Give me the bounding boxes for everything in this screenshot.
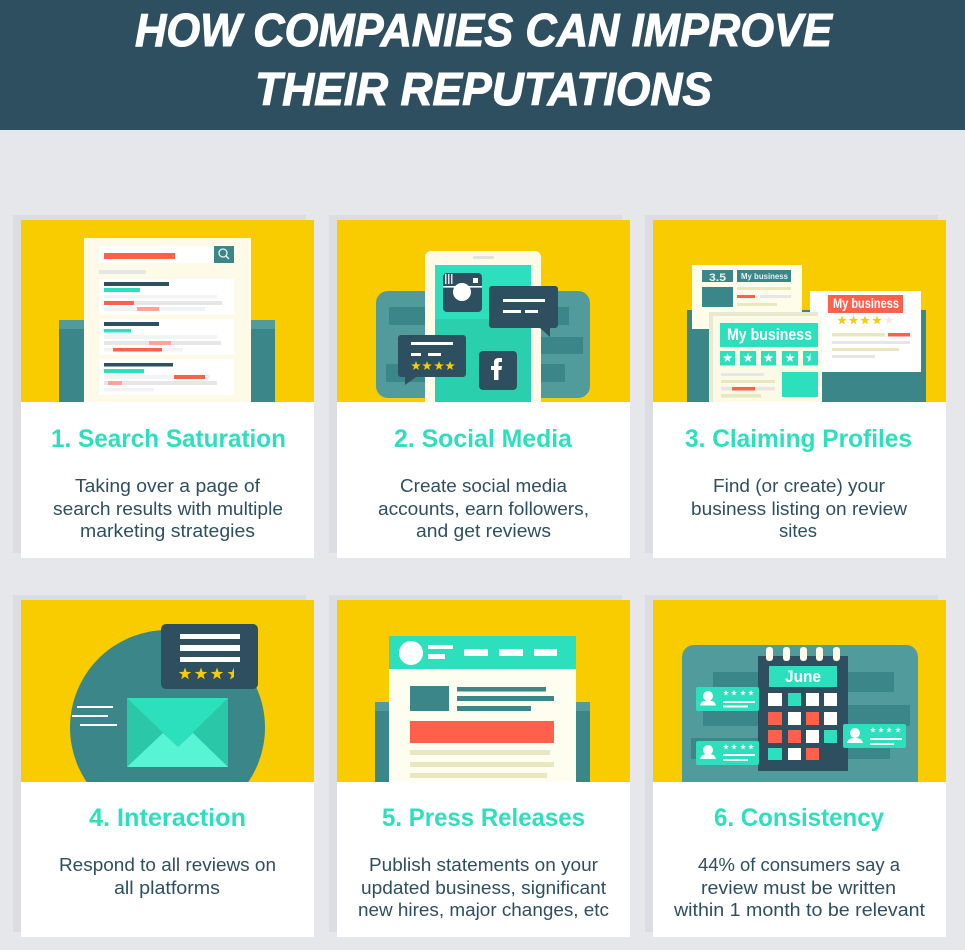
heading: search saturation: 1. Search Saturation: [51, 425, 286, 453]
text: press releases description: new hires, major changes, etc: [358, 900, 609, 920]
icon: envelope and review bubble: [70, 624, 265, 782]
text: social media description: accounts, earn followers,: [378, 499, 589, 519]
heading: interaction: 4. Interaction: [89, 804, 246, 832]
review card bottom left: [696, 741, 759, 765]
heading: consistency: 6. Consistency: [714, 804, 884, 832]
panel: search saturation: [13, 215, 314, 558]
text: social media description: Create social media: [400, 476, 568, 496]
icon: search results page: [59, 238, 275, 402]
icon: calendar with reviews: June: [785, 667, 821, 686]
text: interaction description: Respond to all reviews on: [59, 855, 276, 875]
text: claiming profiles description: sites: [779, 521, 817, 541]
panel: social media: [329, 215, 630, 558]
text: claiming profiles description: business listing on review: [691, 499, 908, 519]
icon: calendar with reviews: [682, 645, 918, 782]
icon: phone with social apps: [376, 251, 590, 402]
text: consistency description: review must be written: [701, 878, 896, 898]
icon: press release web page: [375, 636, 590, 782]
text: social media description: [378, 476, 589, 541]
text: claiming profiles description: Find (or create) your: [713, 476, 885, 496]
title: [135, 4, 833, 115]
title: THEIR REPUTATIONS: [255, 63, 712, 115]
review card top left: [696, 687, 759, 711]
text: consistency description: [673, 855, 925, 920]
review card right: [843, 724, 906, 748]
icon: business profile cards: My business: [727, 325, 812, 344]
text: press releases description: [358, 855, 609, 920]
icon: business profile cards: My business: [741, 271, 788, 281]
panel: consistency: [645, 595, 946, 937]
heading: claiming profiles: 3. Claiming Profiles: [685, 425, 912, 453]
text: consistency description: within 1 month to be relevant: [673, 900, 925, 920]
header banner: [0, 0, 965, 130]
text: search saturation description: search results with multiple: [53, 499, 283, 519]
text: interaction description: [59, 855, 276, 898]
text: search saturation description: Taking over a page of: [75, 476, 261, 496]
text: press releases description: Publish statements on your: [369, 855, 598, 875]
icon: business profile cards: 3.5: [709, 272, 726, 284]
text: claiming profiles description: [691, 476, 908, 541]
icon: business profile cards: [687, 265, 926, 402]
text: interaction description: all platforms: [114, 878, 220, 898]
heading: social media: 2. Social Media: [394, 425, 573, 453]
text: search saturation description: [53, 476, 283, 541]
panel: interaction: [13, 595, 314, 937]
heading: press releases: 5. Press Releases: [382, 804, 585, 832]
panel: press releases: [329, 595, 630, 937]
panel: claiming profiles: [645, 215, 946, 558]
icon: business profile cards: My business: [833, 296, 899, 311]
text: search saturation description: marketing strategies: [80, 521, 255, 541]
text: press releases description: updated business, significant: [361, 878, 606, 898]
text: social media description: and get reviews: [416, 521, 551, 541]
title: HOW COMPANIES CAN IMPROVE: [135, 4, 833, 56]
text: consistency description: 44% of consumers say a: [698, 855, 901, 875]
